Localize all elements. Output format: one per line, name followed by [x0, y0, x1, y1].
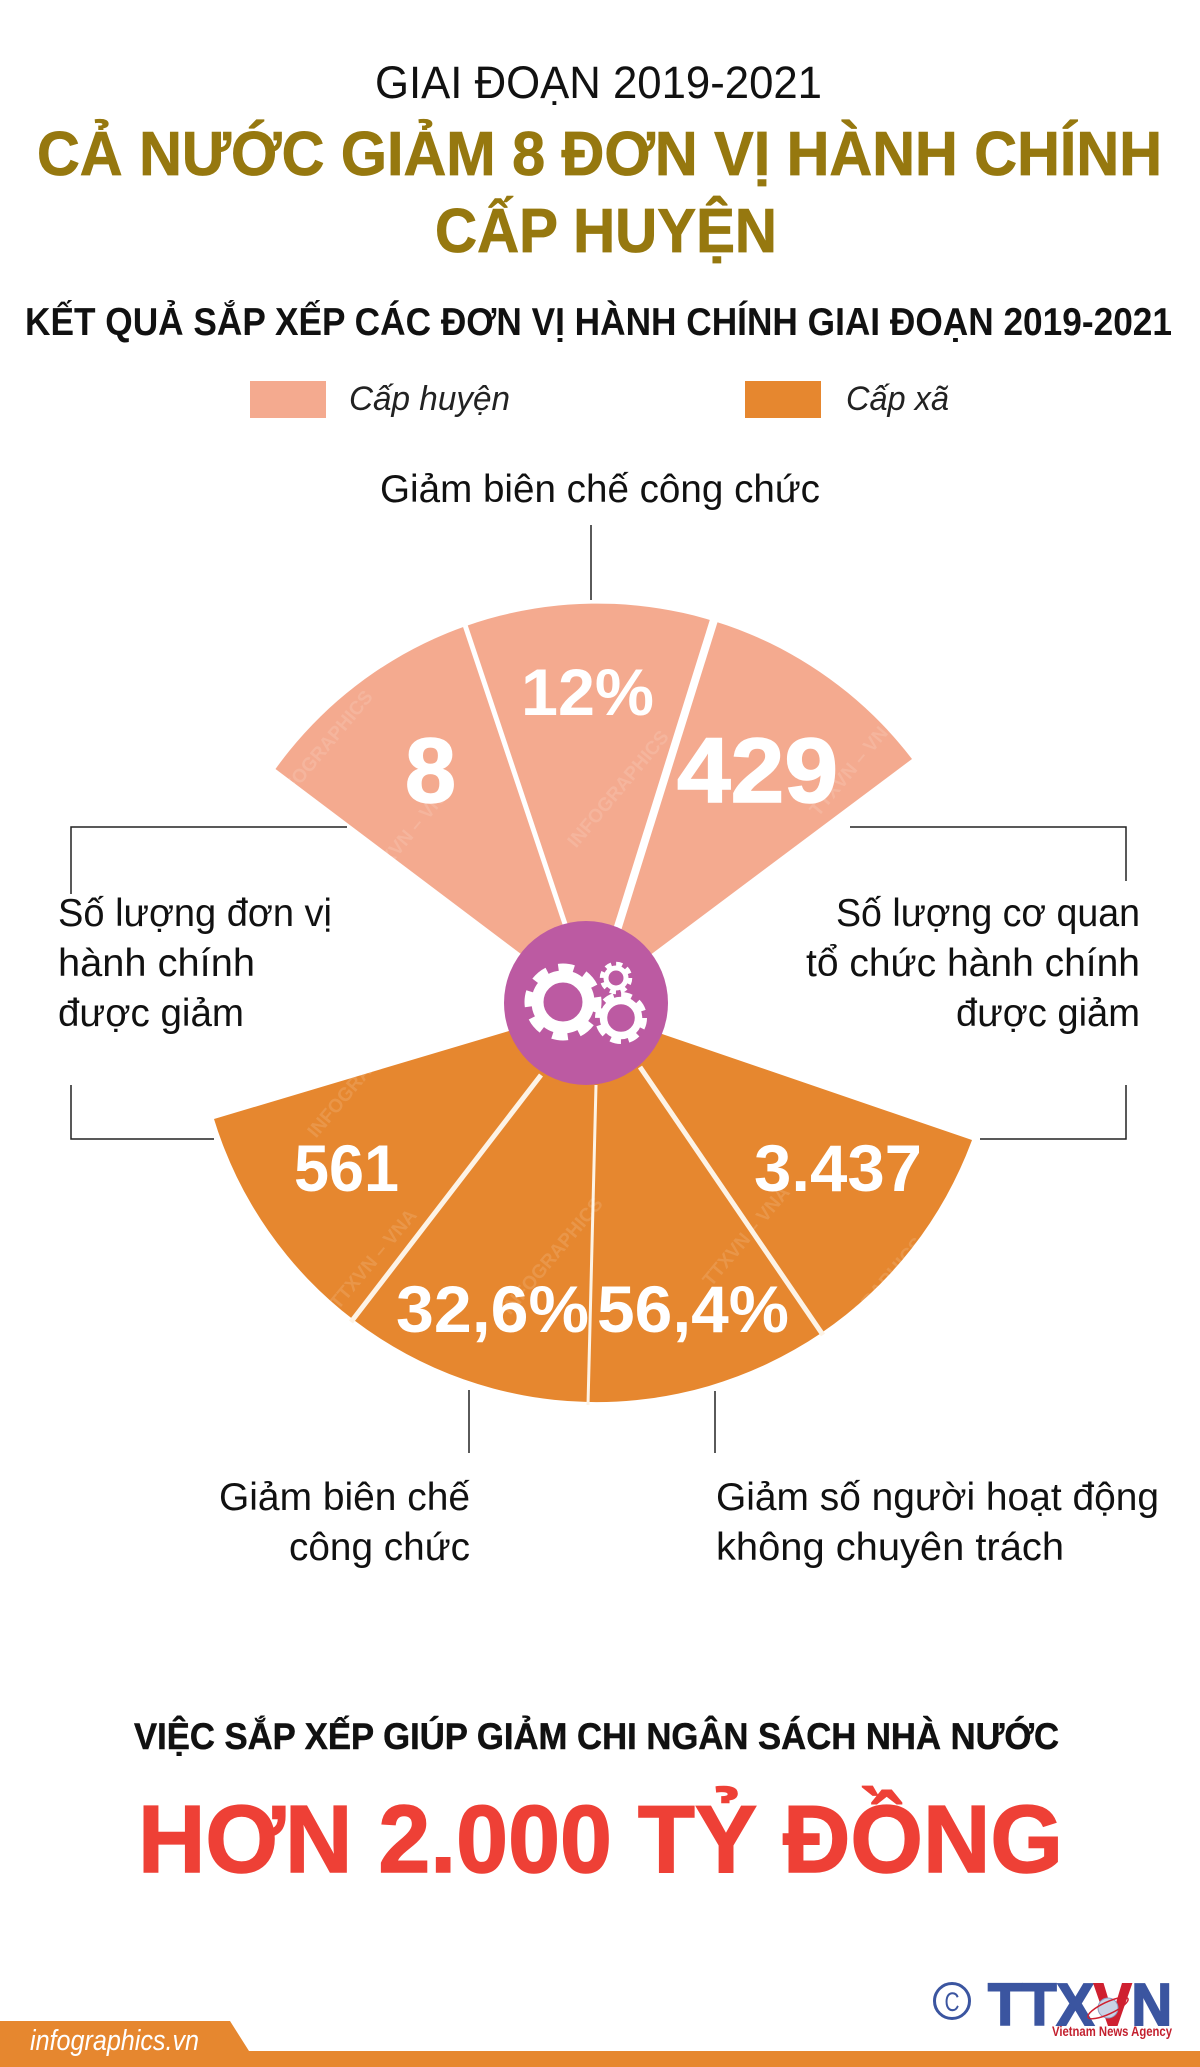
value: 56,4%: 56,4% — [597, 1272, 789, 1346]
legend label: cấp xã: Cấp xã — [846, 380, 949, 418]
orange tab and strip — [0, 2021, 1200, 2067]
main title line 1: CẢ NƯỚC GIẢM 8 ĐƠN VỊ HÀNH CHÍNH — [37, 120, 1162, 189]
value: 32,6%: 32,6% — [396, 1272, 589, 1346]
value: 3.437: 3.437 — [754, 1131, 922, 1205]
purple hub — [504, 921, 668, 1085]
bottom fan chart: cấp xã — [214, 1008, 972, 1405]
legend label: cấp huyện: Cấp huyện — [349, 380, 510, 418]
divider right — [640, 1067, 823, 1335]
copyright symbol — [934, 1984, 970, 2018]
label: số lượng cơ quan tổ chức hành chính được giảm: được giảm — [956, 992, 1140, 1035]
supertitle: GIAI ĐOẠN 2019-2021 — [375, 57, 822, 108]
medium gear — [598, 995, 644, 1041]
label: số lượng cơ quan tổ chức hành chính được giảm: Số lượng cơ quan — [836, 892, 1140, 935]
highlighted amount: HƠN 2.000 TỶ ĐỒNG — [138, 1785, 1063, 1893]
label: số lượng đơn vị hành chính được giảm: Số lượng đơn vị — [58, 892, 332, 935]
value: 8: 8 — [405, 720, 456, 822]
value: 561: 561 — [294, 1131, 399, 1205]
fan divider left — [465, 625, 567, 930]
legend — [250, 380, 949, 418]
label: giảm số người hoạt động không chuyên trách: không chuyên trách — [716, 1526, 1064, 1569]
title block — [37, 57, 1162, 266]
fan divider right — [617, 620, 714, 930]
faint watermarks: TTXVN – VNA — [806, 712, 902, 821]
faint watermarks: INFOGRAPHICS — [268, 687, 378, 812]
faint watermarks — [268, 687, 929, 1359]
label: số lượng đơn vị hành chính được giảm — [58, 892, 332, 1035]
orange fan — [214, 1008, 972, 1402]
website text: infographics.vn — [30, 2025, 199, 2057]
tagline: Vietnam News Agency — [1052, 2023, 1172, 2039]
connector lines — [71, 525, 1126, 1453]
value: 429: 429 — [677, 720, 838, 822]
TTXVN wordmark: TTXVN — [988, 1972, 1172, 2038]
divider left — [351, 1075, 541, 1322]
faint watermarks: INFOGRAPHICS — [564, 727, 674, 852]
faint watermarks: TTXVN – VNA — [362, 779, 458, 888]
globe and swoosh — [1086, 1993, 1130, 2023]
top fan chart: cấp huyện — [276, 604, 912, 1003]
agency logo — [934, 1972, 1172, 2039]
large gear — [525, 964, 601, 1040]
faint watermarks: TTXVN – VNA — [699, 1182, 795, 1291]
faint watermarks: INFOGRAPHICS — [498, 1194, 608, 1319]
label: số lượng đơn vị hành chính được giảm: hành chính — [58, 942, 255, 985]
main title line 2: CẤP HUYỆN — [435, 197, 777, 266]
central gear icon — [504, 921, 668, 1085]
copyright symbol: C — [944, 1987, 960, 2017]
label: giảm biên chế công chức (bottom): Giảm biên chế — [219, 1476, 470, 1519]
label: giảm số người hoạt động không chuyên trách: Giảm số người hoạt động — [716, 1476, 1159, 1519]
legend swatch: cấp xã — [745, 381, 821, 418]
faint watermarks: INFOGRAPHICS — [819, 1234, 929, 1359]
label: số lượng cơ quan tổ chức hành chính được giảm: tổ chức hành chính — [806, 942, 1140, 985]
legend swatch: cấp huyện — [250, 381, 326, 418]
label: giảm số người hoạt động không chuyên trách — [716, 1476, 1159, 1569]
label: giảm biên chế công chức (bottom): công chức — [289, 1526, 470, 1569]
label: giảm biên chế công chức (top): Giảm biên chế công chức — [380, 468, 820, 511]
label: số lượng cơ quan tổ chức hành chính được giảm — [806, 892, 1140, 1035]
faint watermarks: TTXVN – VNA — [326, 1205, 422, 1314]
label: giảm biên chế công chức (bottom) — [219, 1476, 470, 1569]
label: số lượng đơn vị hành chính được giảm: được giảm — [58, 992, 244, 1035]
faint watermarks: INFOGRAPHICS — [304, 1017, 414, 1142]
footer band — [0, 2021, 1200, 2067]
peach fan — [276, 604, 912, 1003]
small gear — [602, 964, 630, 992]
value: 12%: 12% — [521, 655, 654, 729]
divider centre — [588, 1085, 596, 1405]
conclusion text: VIỆC SẮP XẾP GIÚP GIẢM CHI NGÂN SÁCH NHÀ NƯỚC — [134, 1715, 1059, 1757]
